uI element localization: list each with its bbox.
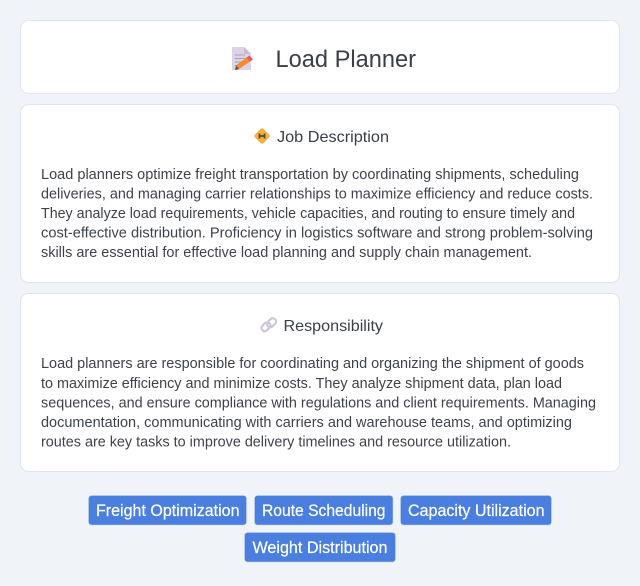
title: Load Planner [276,46,416,73]
tags [88,496,552,562]
panel: title card [20,20,620,94]
text block: responsibility: sequences, and ensure compliance with regulations and client requirements. Managing [41,396,596,412]
text block: responsibility: Load planners are responsible for coordinating and organizing the shipment of goods [41,356,584,372]
icon: chain link [260,317,277,333]
text block: responsibility: routes are key tasks to improve delivery timelines and resource utilization. [41,434,511,450]
text block: job description: They analyze load requirements, vehicle capacities, and routing to ensure timely and [41,206,575,222]
text block: responsibility: documentation, communicating with carriers and warehouse teams, and optimizing [41,415,572,431]
heading: job description: Job Description [277,129,389,146]
panel: responsibility [20,294,620,472]
tag: weight distribution [244,532,396,562]
text block: responsibility: to maximize efficiency and minimize costs. They analyze shipment data, plan load [41,376,562,392]
icon: diamond road sign [254,128,270,144]
panel: job description [20,104,620,282]
tag: capacity utilization [400,496,552,525]
text block: job description: Load planners optimize freight transportation by coordinating shipments, scheduling [41,167,579,183]
heading: responsibility: Responsibility [284,318,383,335]
tag: freight optimization: Freight Optimization [96,502,240,520]
text block: job description: cost-effective distribution. Proficiency in logistics software and strong problem-solving [41,226,593,242]
icon: document with pencil [232,47,253,70]
tag: freight optimization [88,496,246,525]
text block: job description: deliveries, and managing carrier relationships to maximize efficiency and reduce costs. [41,186,593,202]
text block: job description: skills are essential for effective load planning and supply chain management. [41,245,532,261]
text block: job description [41,167,593,261]
tag: route scheduling [254,496,393,525]
text block: responsibility [41,356,596,450]
tag: capacity utilization: Capacity Utilization [408,502,544,520]
tag: weight distribution: Weight Distribution [252,539,388,557]
tag: route scheduling: Route Scheduling [262,502,386,520]
